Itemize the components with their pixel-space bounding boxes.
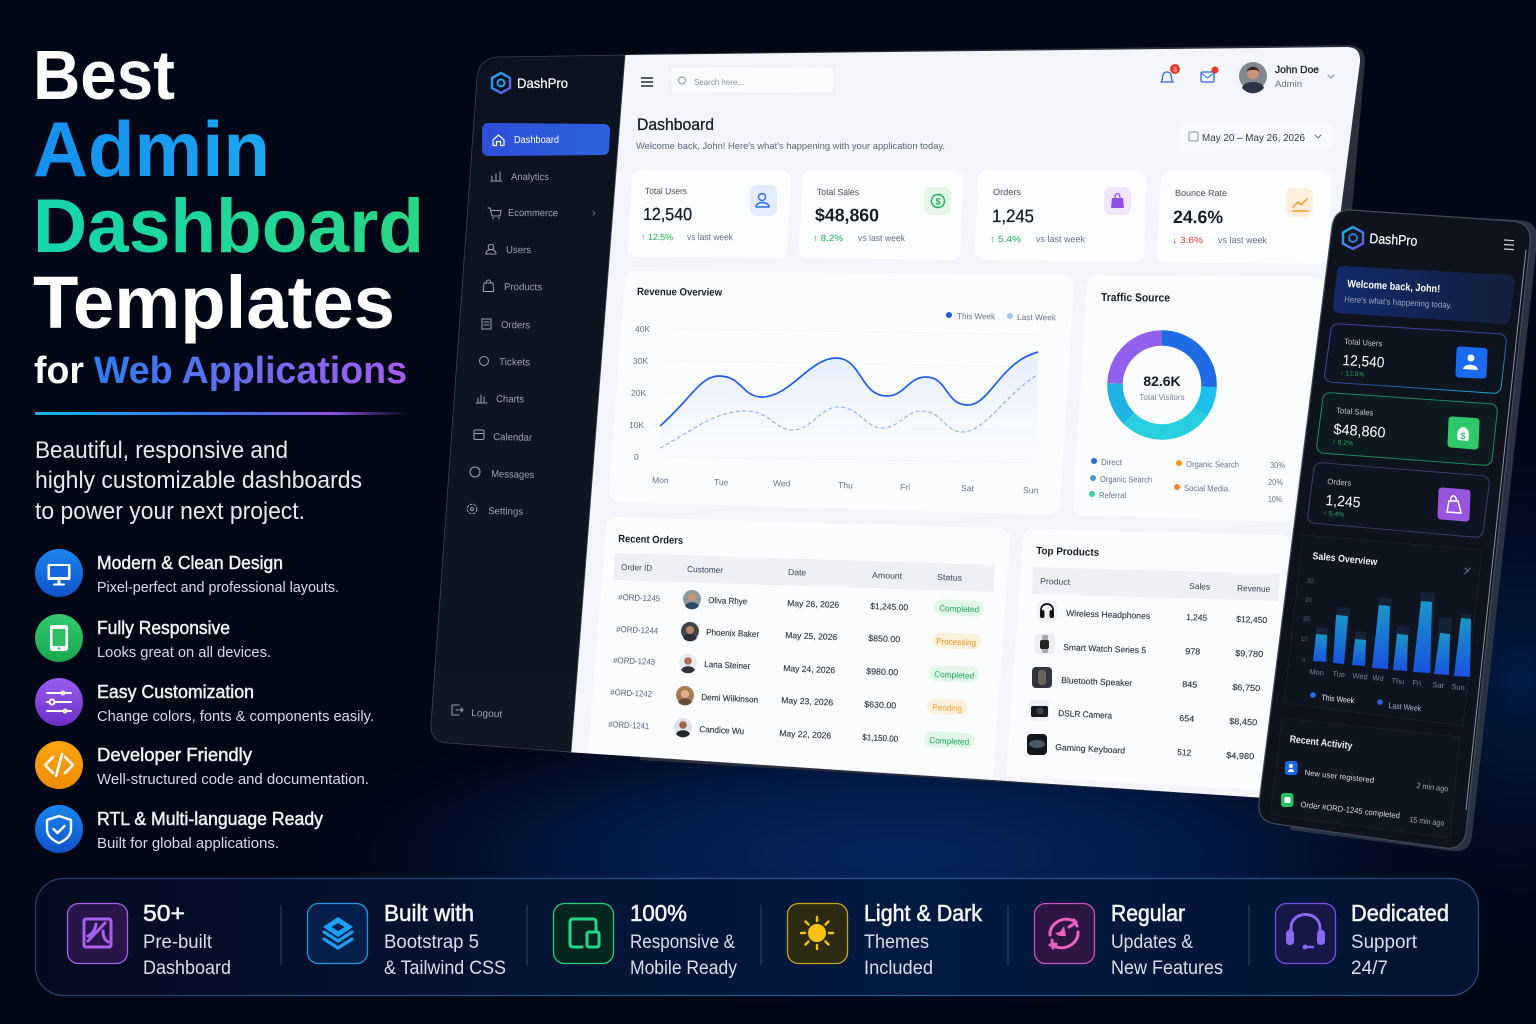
phone card: total sales: ↑ 8.2% <box>1332 439 1354 447</box>
order row 1245: Oliva Rhye <box>708 595 748 606</box>
feature: fully responsive <box>35 614 271 662</box>
stat card: total users: vs last week <box>687 232 733 242</box>
line chart: 10K <box>629 420 644 430</box>
nav items: Ecommerce <box>508 208 558 219</box>
description text: to power your next project. <box>35 498 305 525</box>
bar chart: 10 <box>1301 637 1308 643</box>
title <box>33 36 424 344</box>
notification bell <box>1161 64 1180 82</box>
activity: order completed: 15 min ago <box>1409 815 1445 828</box>
icon: users <box>750 185 777 216</box>
title: Admin <box>33 105 270 193</box>
subtitle: for web applications: for <box>34 350 84 392</box>
stat: pre-built dashboard <box>68 900 231 979</box>
stat: bootstrap and tailwind: Bootstrap 5 <box>384 932 479 953</box>
product: gaming keyboard <box>1027 734 1255 761</box>
stat: bootstrap and tailwind: Built with <box>384 900 474 926</box>
icon: shield <box>35 805 83 853</box>
stat: pre-built dashboard: Dashboard <box>143 958 231 979</box>
icon: headset <box>1276 904 1336 964</box>
nav items <box>467 172 595 518</box>
icon: money: $ <box>935 196 941 206</box>
table header <box>613 553 995 592</box>
order row 1243: #ORD-1243 <box>613 655 656 667</box>
order row 1241 <box>608 718 974 749</box>
traffic legend: Organic Search <box>1100 474 1152 484</box>
order row 1245: $1,245.00 <box>870 601 909 612</box>
donut chart <box>1115 338 1209 432</box>
line chart: 20K <box>631 388 646 398</box>
product: dslr camera: 654 <box>1179 713 1195 724</box>
order row 1242: Pending <box>932 702 963 713</box>
description text <box>35 437 362 525</box>
activity: order completed: Order #ORD-1245 completed <box>1300 800 1400 820</box>
product: smart watch: Smart Watch Series 5 <box>1063 642 1147 655</box>
phone card: total users: 12,540 <box>1342 352 1385 372</box>
nav items: Products <box>504 282 542 293</box>
bar chart: 20 <box>1305 598 1312 604</box>
stat card: bounce rate: vs last week <box>1218 235 1268 245</box>
phone panel: sales overview <box>1284 535 1482 726</box>
line chart: Mon <box>652 475 669 485</box>
icon: devices <box>554 904 614 964</box>
phone card: total users: Total Users <box>1344 337 1382 348</box>
product: bluetooth speaker: $6,750 <box>1232 682 1261 693</box>
phone side highlight <box>1466 250 1526 810</box>
stat card: total users: Total Users <box>645 186 687 196</box>
chart legend: This Week <box>957 311 996 321</box>
date picker <box>1184 127 1328 147</box>
icon: sun <box>788 904 848 964</box>
stat: responsive: Responsive & <box>630 932 735 953</box>
order row 1243: $980.00 <box>866 666 899 677</box>
gradient divider <box>35 412 407 415</box>
line chart: 40K <box>635 324 650 334</box>
phone chart legend: Last Week <box>1388 701 1423 713</box>
stat card: bounce rate: ↓ 3.6% <box>1172 235 1203 245</box>
product: wireless headphones <box>1037 601 1268 625</box>
nav active: dashboard: Dashboard <box>514 135 559 146</box>
bar chart: Sat <box>1432 680 1445 690</box>
stat: dedicated support <box>1276 900 1449 979</box>
icon: refresh <box>1034 904 1094 964</box>
icon: sliders <box>35 678 83 726</box>
user name: John Doe <box>1275 65 1319 76</box>
traffic legend: Direct <box>1101 457 1123 467</box>
chart legend <box>946 311 1057 322</box>
phone logo and brand <box>1343 227 1418 249</box>
nav items: Users <box>506 245 531 256</box>
top bar <box>641 62 1334 94</box>
nav items: Orders <box>501 320 530 331</box>
order row 1244: Phoenix Baker <box>706 627 759 639</box>
order row 1244: Processing <box>936 636 977 648</box>
panel: revenue overview <box>619 281 1064 505</box>
stat card: orders: 1,245 <box>992 206 1034 226</box>
products header: Product <box>1040 576 1071 587</box>
notification bell: 3 <box>1173 66 1177 74</box>
order row 1242: May 23, 2026 <box>781 695 834 707</box>
device edge <box>630 45 1365 800</box>
stat card: orders: ↑ 5.4% <box>990 234 1021 244</box>
page heading <box>636 116 945 151</box>
sidebar panel <box>431 55 625 752</box>
stat: regular updates: Regular <box>1111 900 1185 926</box>
icon: users tile <box>1459 350 1484 375</box>
line chart: Fri <box>900 482 910 492</box>
order row 1241: Candice Wu <box>699 724 745 736</box>
traffic legend: 20% <box>1268 477 1283 487</box>
line chart: Sat <box>961 483 975 493</box>
phone card: orders: 1,245 <box>1325 492 1361 512</box>
products header <box>1032 567 1280 601</box>
stat: dedicated support: Dedicated <box>1351 900 1449 926</box>
stat: dedicated support: Support <box>1351 932 1418 953</box>
table header: Amount <box>872 570 903 581</box>
product: bluetooth speaker: Bluetooth Speaker <box>1061 675 1132 688</box>
phone card: total users: ↑ 12.5% <box>1340 370 1365 378</box>
nav items: Charts <box>496 394 524 405</box>
feature: easy customization: Change colors, fonts & components easily. <box>97 709 374 725</box>
phone side edge <box>1290 211 1536 851</box>
stat card: total sales: ↑ 8.2% <box>813 233 843 243</box>
icon: monitor <box>35 549 83 597</box>
order row 1245: #ORD-1245 <box>618 592 661 603</box>
stat: light and dark: Themes <box>864 932 929 953</box>
bottom feature bar <box>36 878 1478 996</box>
stat: light and dark: Included <box>864 958 933 979</box>
product: wireless headphones: 1,245 <box>1186 612 1208 623</box>
traffic legend: 30% <box>1270 460 1285 470</box>
feature: rtl and multi-language <box>35 805 324 853</box>
icon: code brackets <box>35 741 83 789</box>
nav items: Calendar <box>493 432 533 444</box>
donut chart: Total Visitors <box>1139 393 1185 402</box>
phone card: total sales <box>1324 400 1490 458</box>
stat card: total users <box>636 178 783 250</box>
feature: rtl and multi-language: RTL & Multi-language Ready <box>97 808 324 829</box>
table header: Order ID <box>621 562 652 573</box>
stat card: total sales: $48,860 <box>815 205 879 225</box>
table header: Customer <box>687 564 723 575</box>
table header: Status <box>937 572 962 583</box>
stat card: bounce rate: Bounce Rate <box>1175 188 1227 198</box>
traffic legend: Referral <box>1099 490 1126 500</box>
icon: smartphone <box>35 614 83 662</box>
phone card: total sales: $48,860 <box>1333 421 1386 442</box>
order row 1241: $1,150.00 <box>862 732 899 744</box>
panel: recent orders: Recent Orders <box>618 533 683 547</box>
order row 1245 <box>618 590 984 617</box>
product: wireless headphones: $12,450 <box>1236 614 1268 625</box>
feature: modern and clean design: Pixel-perfect and professional layouts. <box>97 580 339 596</box>
logo <box>492 73 568 93</box>
description text: Beautiful, responsive and <box>35 437 288 464</box>
nav items: Messages <box>491 469 534 481</box>
dashboard mockup <box>431 45 1365 800</box>
activity: new user <box>1285 761 1449 794</box>
panel: top products <box>1006 529 1290 790</box>
bar chart: Wed <box>1352 671 1368 681</box>
stat: regular updates <box>1034 900 1223 979</box>
mail icon <box>1201 66 1218 82</box>
feature: rtl and multi-language: Built for global applications. <box>97 836 279 852</box>
stat: responsive: Mobile Ready <box>630 958 737 979</box>
stat card: total sales: vs last week <box>858 233 905 243</box>
bar chart: Thu <box>1391 676 1405 686</box>
logout <box>452 705 503 720</box>
product: smart watch: 978 <box>1185 646 1201 657</box>
order row 1243 <box>613 654 979 683</box>
stat card: total sales <box>807 178 955 252</box>
bar chart <box>1301 579 1471 692</box>
hamburger icon <box>641 78 653 86</box>
stat card: total users: ↑ 12.5% <box>641 232 673 242</box>
table header: Date <box>788 567 807 578</box>
donut chart: 82.6K <box>1143 373 1181 389</box>
icon: layers <box>308 904 368 964</box>
activity: new user: 2 min ago <box>1416 781 1449 794</box>
product: bluetooth speaker: 845 <box>1182 679 1198 690</box>
line chart: Thu <box>838 480 853 490</box>
feature: modern and clean design <box>35 549 339 597</box>
panel: top products: Top Products <box>1036 545 1099 559</box>
phone hamburger <box>1504 240 1514 250</box>
icon: money bag tile: $ <box>1460 431 1466 441</box>
order row 1244 <box>616 622 981 650</box>
bar chart: 0 <box>1302 658 1306 664</box>
title: Dashboard <box>33 184 424 269</box>
feature: easy customization: Easy Customization <box>97 681 254 702</box>
phone screen <box>1259 210 1530 848</box>
feature: easy customization <box>35 678 374 726</box>
product: gaming keyboard: 512 <box>1177 747 1192 758</box>
order row 1241: May 22, 2026 <box>779 728 832 741</box>
feature: modern and clean design: Modern & Clean Design <box>97 552 283 573</box>
chart legend: Last Week <box>1017 312 1057 322</box>
stat card: bounce rate <box>1165 179 1323 256</box>
stat: light and dark: Light & Dark <box>864 900 982 926</box>
order row 1243: Completed <box>934 669 975 681</box>
icon: template <box>68 904 128 964</box>
stat: regular updates: New Features <box>1111 958 1223 979</box>
logo: DashPro <box>517 75 568 91</box>
product: bluetooth speaker <box>1032 667 1261 693</box>
order row 1241: #ORD-1241 <box>608 719 650 731</box>
bar chart: Mon <box>1309 667 1324 677</box>
feature: developer friendly: Well-structured code and documentation. <box>97 772 369 788</box>
phone card: orders: Orders <box>1327 477 1352 488</box>
line chart: Tue <box>714 477 729 487</box>
product: gaming keyboard: Gaming Keyboard <box>1055 742 1126 756</box>
order row 1245: Completed <box>939 603 980 614</box>
line chart: Wed <box>773 478 791 488</box>
phone card: orders: ↑ 5.4% <box>1323 510 1345 519</box>
stat card: orders <box>983 178 1138 254</box>
logout: Logout <box>471 708 503 720</box>
phone logo and brand: DashPro <box>1369 230 1418 249</box>
products header: Sales <box>1189 581 1210 592</box>
traffic legend: 10% <box>1268 494 1282 504</box>
title: Templates <box>33 261 395 344</box>
stat card: orders: vs last week <box>1036 234 1086 244</box>
traffic legend <box>1089 457 1285 504</box>
order row 1245: May 26, 2026 <box>787 598 840 610</box>
bar chart: 20 <box>1303 617 1310 623</box>
stat: responsive <box>554 900 737 979</box>
icon: bag tile <box>1441 491 1467 518</box>
phone panel: recent activity <box>1270 718 1460 838</box>
nav items: Settings <box>488 506 523 518</box>
products header: Revenue <box>1237 583 1271 594</box>
bar chart: 30 <box>1307 579 1314 585</box>
phone panel: sales overview: Sales Overview <box>1312 551 1378 568</box>
panel: revenue overview: Revenue Overview <box>637 286 723 299</box>
line chart: Sun <box>1023 485 1039 495</box>
phone panel: recent activity: Recent Activity <box>1289 734 1353 752</box>
main content surface <box>566 47 1360 798</box>
product: wireless headphones: Wireless Headphones <box>1066 608 1150 621</box>
phone mockup <box>1259 210 1536 851</box>
stat: dedicated support: 24/7 <box>1351 958 1388 979</box>
welcome card: Here's what's happening today. <box>1344 294 1452 310</box>
bar chart: Sun <box>1451 682 1465 692</box>
stat card: bounce rate: 24.6% <box>1173 207 1223 227</box>
search box: Search here... <box>694 77 744 87</box>
title: Best <box>33 36 175 114</box>
bar chart: Fri <box>1412 678 1422 688</box>
welcome card: Welcome back, John! <box>1347 278 1441 295</box>
feature: fully responsive: Looks great on all devices. <box>97 645 271 661</box>
traffic legend: Social Media <box>1184 483 1228 493</box>
nav active: dashboard <box>488 129 604 150</box>
order row 1243: May 24, 2026 <box>783 663 836 675</box>
stat: bootstrap and tailwind <box>308 900 506 979</box>
product: dslr camera <box>1029 700 1258 727</box>
phone card: total sales: Total Sales <box>1336 406 1374 418</box>
bar chart: Wd <box>1372 673 1384 683</box>
order row 1242: #ORD-1242 <box>610 687 653 699</box>
phone chart legend <box>1310 692 1423 713</box>
user name: Admin <box>1275 79 1302 89</box>
feature: fully responsive: Fully Responsive <box>97 617 230 638</box>
stat card: total sales: Total Sales <box>817 187 860 197</box>
traffic legend: Organic Search <box>1186 459 1239 469</box>
order row 1241: Completed <box>929 735 970 747</box>
feature: developer friendly <box>35 741 369 789</box>
nav items: Tickets <box>499 357 530 369</box>
phone chart legend: This Week <box>1321 693 1356 705</box>
stat: responsive: 100% <box>630 900 687 926</box>
icon: shopping bag <box>1104 187 1131 215</box>
user avatar <box>1239 62 1267 93</box>
product: dslr camera: DSLR Camera <box>1058 708 1113 721</box>
user name <box>1275 65 1334 89</box>
feature: developer friendly: Developer Friendly <box>97 744 253 765</box>
line chart: 0 <box>634 452 639 462</box>
panel: recent orders <box>588 517 1010 779</box>
product: dslr camera: $8,450 <box>1229 716 1258 727</box>
order row 1243: Lana Steiner <box>704 659 751 671</box>
panel: traffic source: Traffic Source <box>1101 292 1170 305</box>
stat card: orders: Orders <box>993 187 1022 197</box>
order row 1244: #ORD-1244 <box>616 624 659 636</box>
line chart <box>629 324 1040 495</box>
panel: traffic source <box>1083 285 1315 512</box>
subtitle: for web applications: Web Applications <box>94 350 407 392</box>
stat card: total users: 12,540 <box>643 204 692 224</box>
order row 1244: $850.00 <box>868 633 901 644</box>
stat: bootstrap and tailwind: & Tailwind CSS <box>384 958 506 979</box>
stat: regular updates: Updates & <box>1111 932 1193 953</box>
date picker: May 20 – May 26, 2026 <box>1202 133 1305 144</box>
activity: new user: New user registered <box>1304 768 1375 785</box>
order row 1242: $630.00 <box>864 699 897 711</box>
bar chart: Tue <box>1332 669 1345 679</box>
stat: pre-built dashboard: Pre-built <box>143 932 213 953</box>
order row 1242 <box>610 686 967 715</box>
stat: light and dark <box>788 900 982 979</box>
icon: money bag tile <box>1451 420 1476 446</box>
phone card: total users <box>1332 331 1499 386</box>
stat: pre-built dashboard: 50+ <box>143 900 185 926</box>
icon: trend <box>1286 188 1313 217</box>
line chart: 30K <box>633 356 648 366</box>
page heading: Dashboard <box>637 116 714 134</box>
icon: money <box>924 187 951 215</box>
activity: order completed <box>1281 793 1445 828</box>
order row 1242: Demi Wilkinson <box>701 692 759 705</box>
product: smart watch: $9,780 <box>1235 648 1264 659</box>
product: smart watch <box>1035 634 1264 659</box>
page heading: Welcome back, John! Here's what's happening with your application today. <box>636 141 945 151</box>
description text: highly customizable dashboards <box>35 467 362 494</box>
nav items: Analytics <box>511 172 549 183</box>
product: gaming keyboard: $4,980 <box>1226 750 1255 761</box>
phone card: orders <box>1315 470 1482 530</box>
welcome card <box>1339 272 1509 318</box>
order row 1244: May 25, 2026 <box>785 630 838 642</box>
search box <box>670 66 834 94</box>
